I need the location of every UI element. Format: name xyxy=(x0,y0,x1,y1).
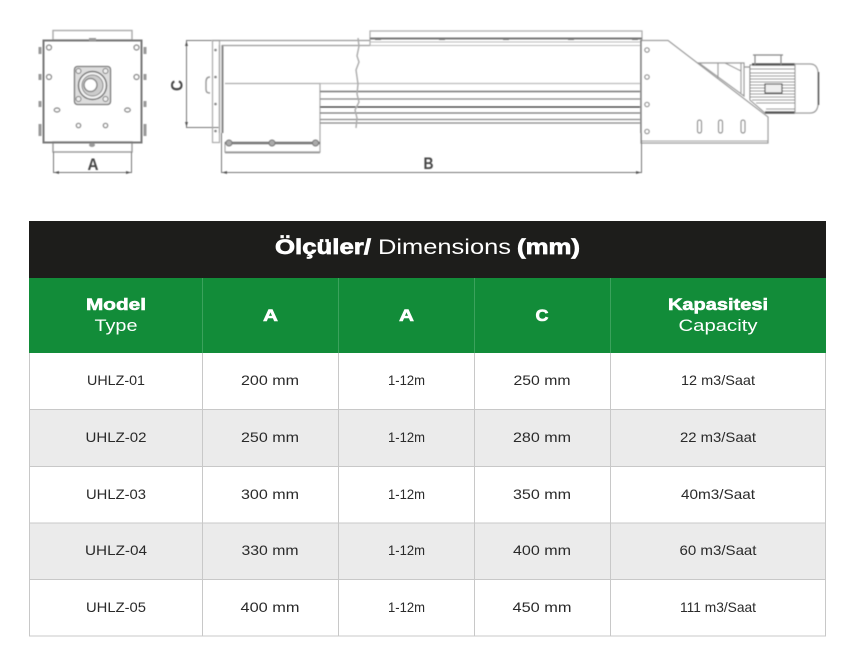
zebra row backgrounds xyxy=(29,410,826,580)
row 5: UHLZ-05 xyxy=(86,599,146,615)
row 1: 1-12m xyxy=(388,372,425,388)
row 1: 12 m3/Saat xyxy=(681,372,755,388)
front view technical drawing xyxy=(38,30,146,174)
row 2: 250 mm xyxy=(241,429,299,445)
drive housing xyxy=(641,40,768,143)
row 3: 1-12m xyxy=(388,486,425,502)
row 2: 280 mm xyxy=(513,429,571,445)
dimension A xyxy=(54,152,132,174)
dimension A: A xyxy=(88,155,98,174)
row 3: 40m3/Saat xyxy=(681,486,755,502)
side bolts xyxy=(38,38,146,147)
row 2: 1-12m xyxy=(388,429,425,445)
row 2: 22 m3/Saat xyxy=(680,429,756,445)
bearing flange xyxy=(74,66,110,104)
title bar: Ölçüler/ xyxy=(275,236,371,259)
inlet end plate xyxy=(206,40,222,142)
header row: Capacity xyxy=(678,316,758,335)
header row: Type xyxy=(94,316,138,335)
header row: C xyxy=(536,306,548,325)
row 2 xyxy=(86,429,756,445)
row 4: UHLZ-04 xyxy=(85,542,147,558)
row 3: 300 mm xyxy=(241,486,299,502)
row 4: 330 mm xyxy=(242,542,298,558)
row 5: 111 m3/Saat xyxy=(680,599,756,615)
title bar xyxy=(29,221,826,278)
row 5: 1-12m xyxy=(388,599,425,615)
row 3 xyxy=(86,486,755,502)
row 4: 400 mm xyxy=(513,542,571,558)
electric motor xyxy=(750,55,818,113)
square housing xyxy=(44,40,142,142)
row 1 xyxy=(87,372,755,388)
row 1: UHLZ-01 xyxy=(87,372,145,388)
dimensions table xyxy=(29,221,826,636)
header row xyxy=(29,278,826,353)
row 1: 200 mm xyxy=(241,372,299,388)
row 4 xyxy=(85,542,757,558)
bottom tab xyxy=(53,142,132,152)
header row: Kapasitesi xyxy=(668,295,768,314)
inlet box xyxy=(225,84,320,152)
row 1: 250 mm xyxy=(514,372,570,388)
row 5: 450 mm xyxy=(512,599,572,615)
break line xyxy=(355,38,359,128)
title bar: Dimensions xyxy=(378,236,511,259)
row 2: UHLZ-02 xyxy=(86,429,147,445)
header row: Model xyxy=(86,295,146,314)
row 5: 400 mm xyxy=(240,599,300,615)
top rails xyxy=(212,31,642,46)
title bar: (mm) xyxy=(517,236,580,259)
screw tube lines xyxy=(320,84,640,123)
header row: A xyxy=(399,306,414,325)
mounting holes xyxy=(46,45,139,128)
top tab xyxy=(53,30,132,40)
gear reducer xyxy=(699,63,750,100)
row 3: UHLZ-03 xyxy=(86,486,146,502)
header row: A xyxy=(263,306,278,325)
dimension B xyxy=(221,133,642,174)
dimension B: B xyxy=(424,154,434,173)
side view conveyor drawing xyxy=(206,31,818,174)
row 5 xyxy=(86,599,756,615)
row 4: 60 m3/Saat xyxy=(680,542,757,558)
row 3: 350 mm xyxy=(513,486,571,502)
row 4: 1-12m xyxy=(388,542,425,558)
dimension C xyxy=(168,40,219,128)
dimension C: C xyxy=(168,80,186,91)
